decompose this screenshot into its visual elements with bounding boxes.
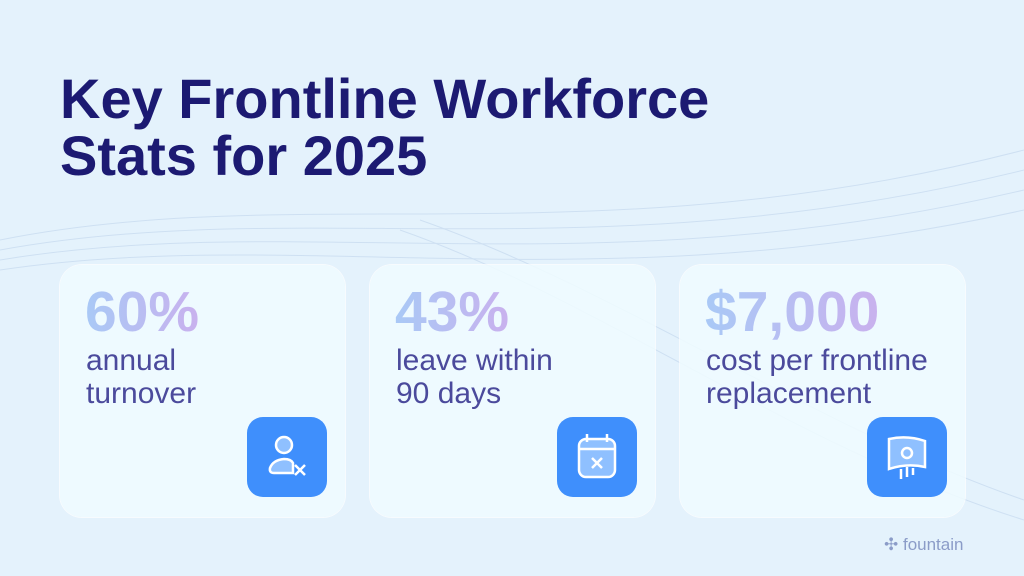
icon: person x bbox=[247, 417, 327, 497]
panel: turnover: turnover bbox=[86, 377, 196, 410]
panel: 90 days: 43% bbox=[395, 280, 509, 344]
panel: cost: replacement bbox=[706, 377, 871, 410]
title: Stats for 2025 bbox=[60, 124, 427, 187]
panel: turnover bbox=[60, 265, 345, 517]
panel: 90 days: 90 days bbox=[396, 377, 501, 410]
panel: cost: cost per frontline bbox=[706, 344, 928, 377]
icon: money bbox=[867, 417, 947, 497]
panel: turnover: annual bbox=[86, 344, 176, 377]
panel: cost bbox=[680, 265, 965, 517]
panel: turnover: 60% bbox=[85, 280, 199, 344]
panel: 90 days: leave within bbox=[396, 344, 553, 377]
panel: cost: $7,000 bbox=[705, 280, 879, 344]
icon: calendar x bbox=[557, 417, 637, 497]
panel: 90 days bbox=[370, 265, 655, 517]
logo: ✣ fountain bbox=[884, 535, 963, 554]
title bbox=[60, 67, 709, 187]
title: Key Frontline Workforce bbox=[60, 67, 709, 130]
